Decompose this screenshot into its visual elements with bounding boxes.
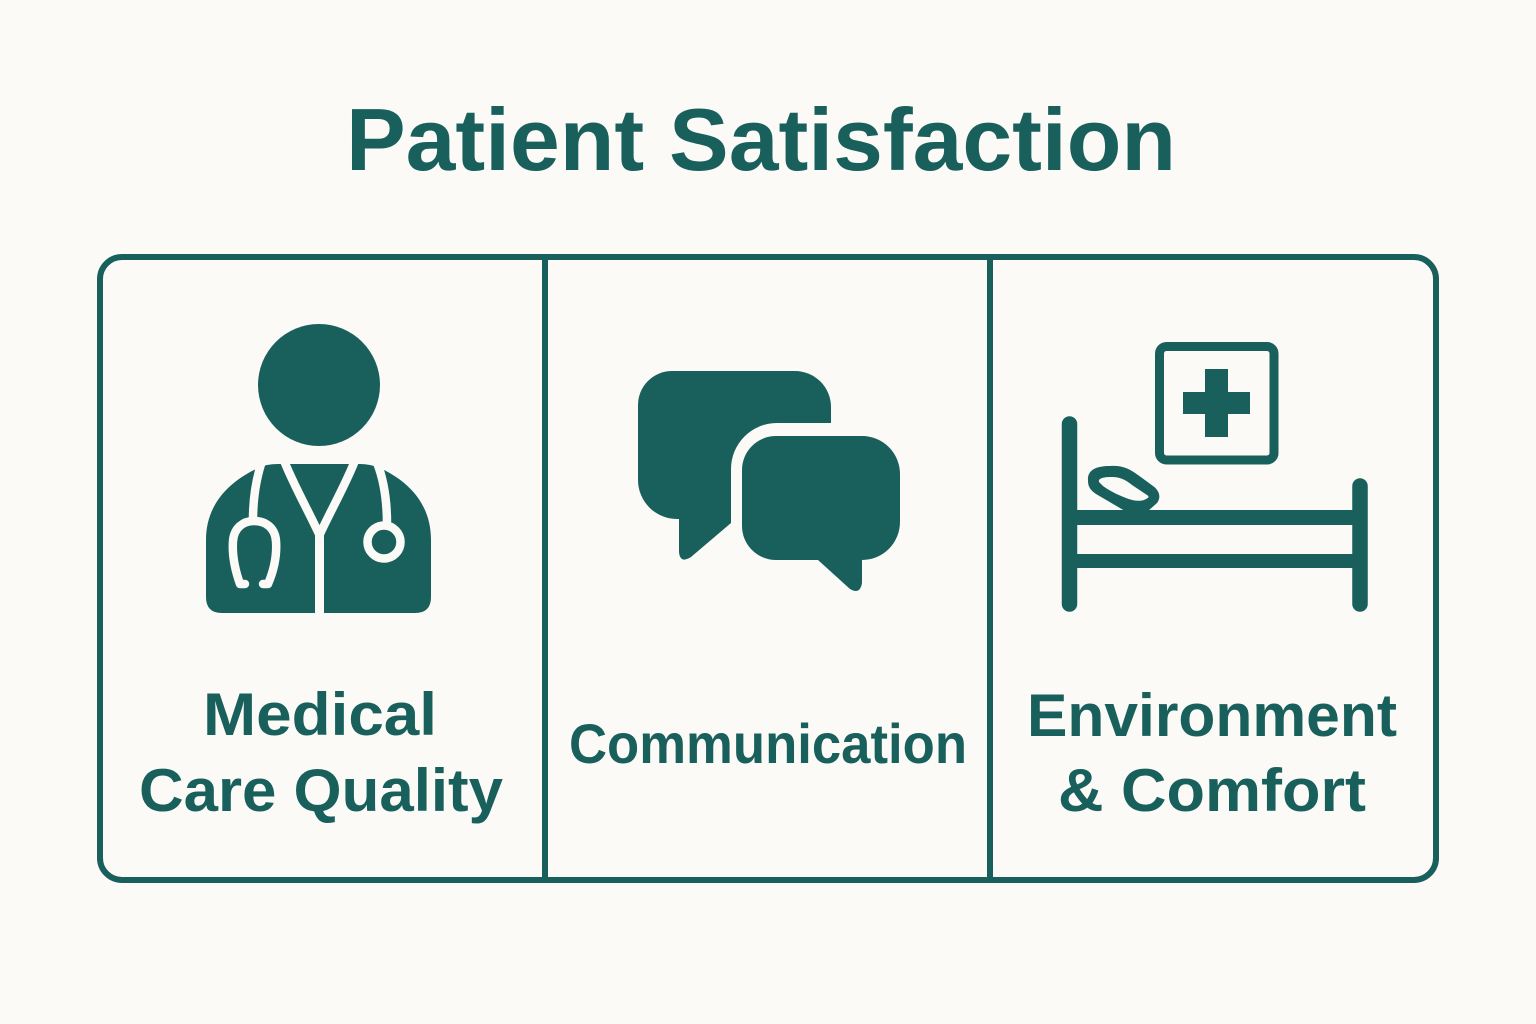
panel: three-column frame xyxy=(100,257,1436,880)
label: environment and comfort: & Comfort xyxy=(1058,757,1366,824)
label: medical care quality: Care Quality xyxy=(139,757,504,824)
label: communication: Communication xyxy=(569,712,967,775)
label: medical care quality: Medical xyxy=(203,681,437,748)
icon: hospital bed with cross sign xyxy=(1070,346,1360,604)
label: environment and comfort xyxy=(1027,682,1397,824)
icon: speech bubbles xyxy=(638,371,900,591)
label: medical care quality xyxy=(139,681,504,824)
panel: medical care quality xyxy=(139,324,504,824)
title: Patient Satisfaction xyxy=(346,90,1176,189)
panel: environment and comfort xyxy=(1027,346,1397,824)
label: environment and comfort: Environment xyxy=(1027,682,1397,749)
icon: doctor xyxy=(206,324,431,613)
panel: communication xyxy=(569,371,967,775)
